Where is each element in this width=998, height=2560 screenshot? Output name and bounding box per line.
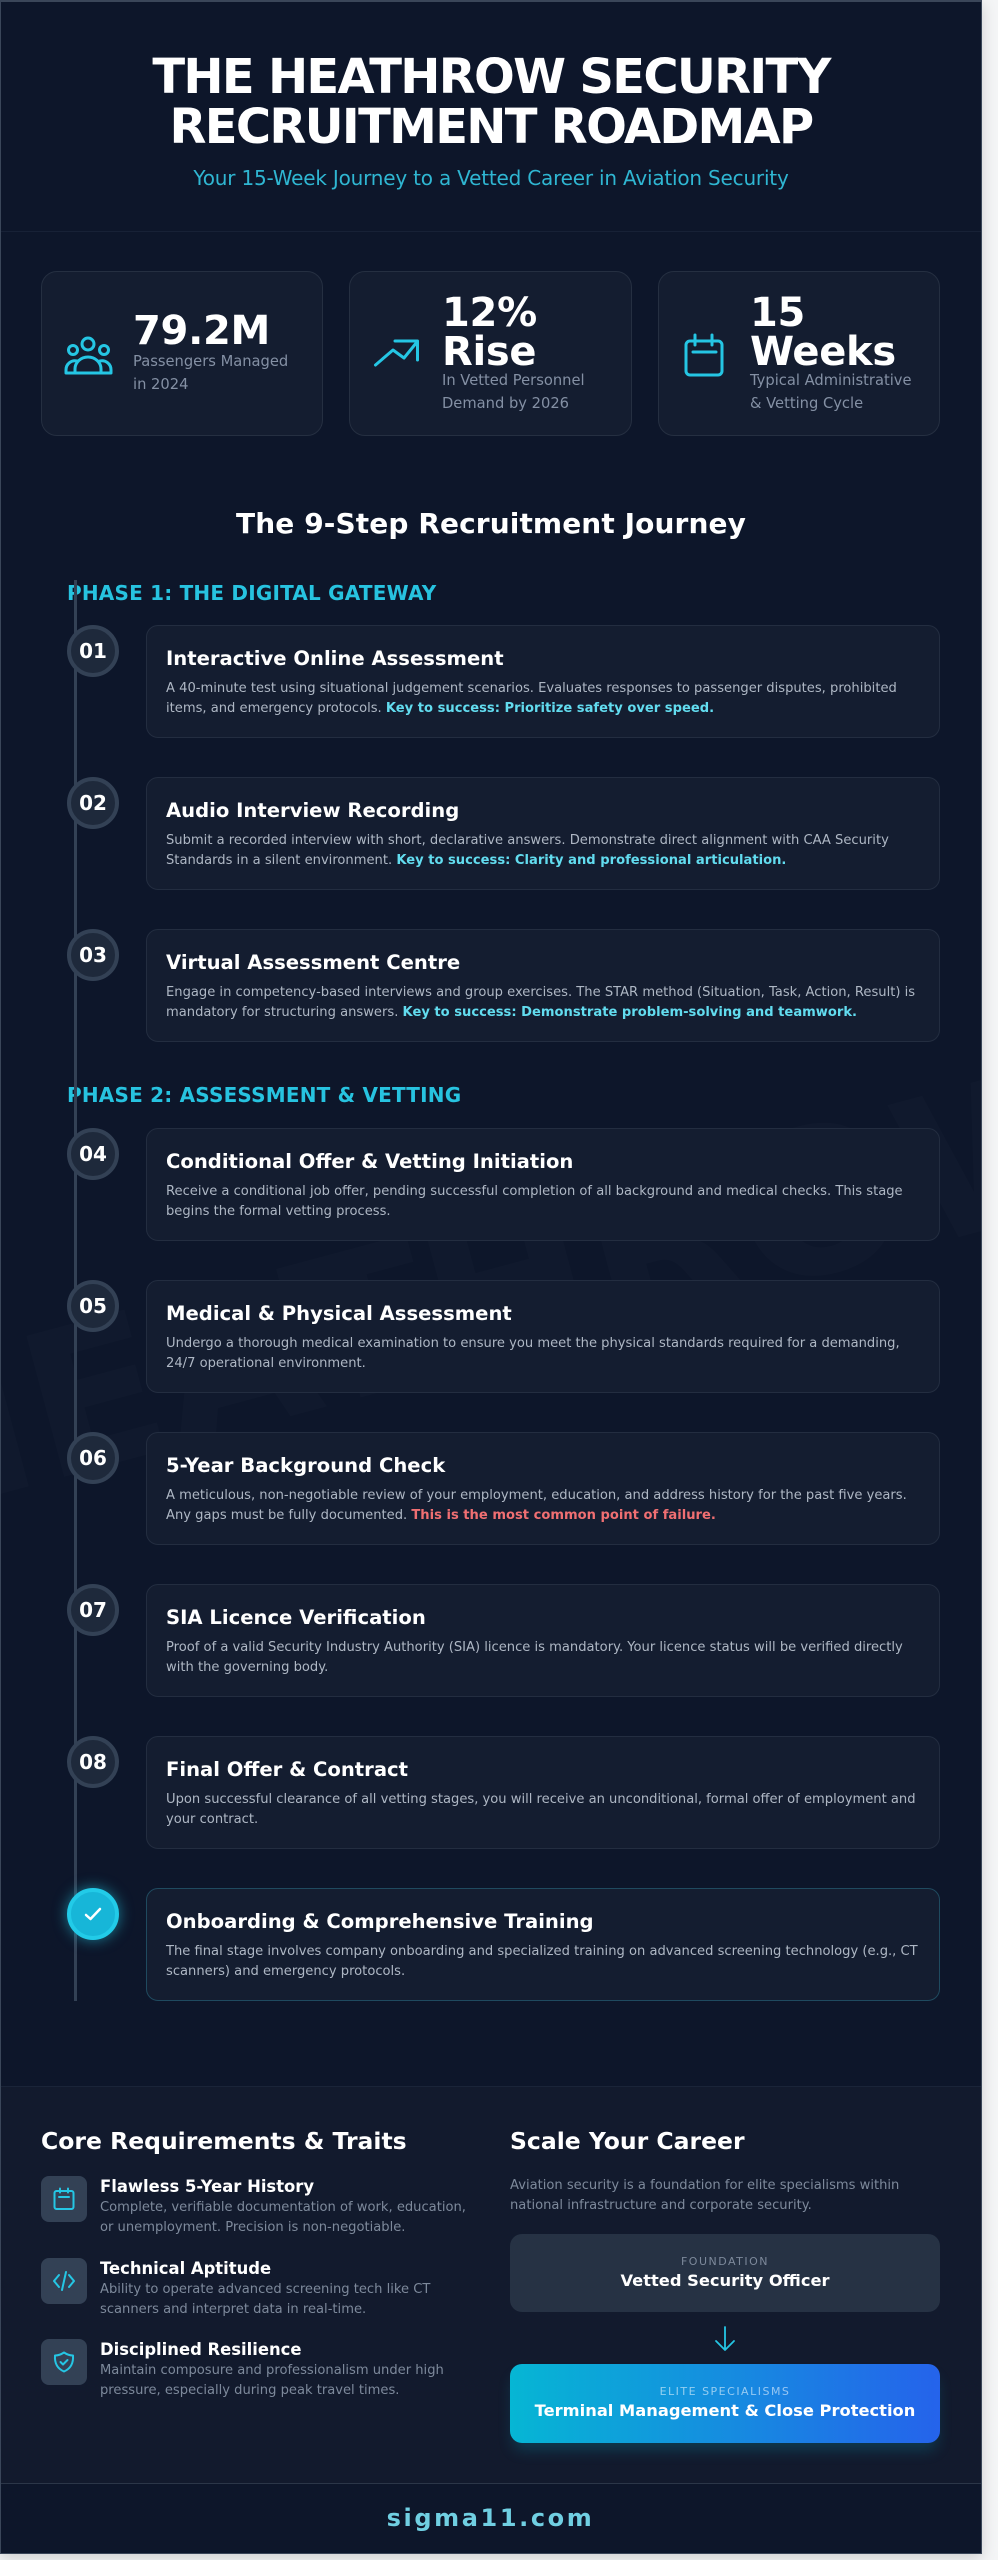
requirement text: Maintain composure and professionalism under high (100, 2363, 444, 2378)
elite box (510, 2364, 940, 2443)
step card (146, 777, 940, 890)
step title: 5-Year Background Check (166, 1454, 445, 1477)
step number (67, 625, 119, 677)
step description: mandatory for structuring answers. Key to success: Demonstrate problem-solving and teamwork. (166, 1005, 857, 1020)
timeline line (74, 580, 77, 2001)
step card (146, 1888, 940, 2001)
requirement title: Technical Aptitude (100, 2259, 271, 2278)
icon: users (64, 336, 112, 374)
step card (146, 929, 940, 1042)
step description: Standards in a silent environment. Key to success: Clarity and professional articulation. (166, 853, 786, 868)
step number: 06 (79, 1446, 107, 1470)
label: Passengers Managed (133, 353, 288, 370)
step description: A 40-minute test using situational judgement scenarios. Evaluates responses to passenger disputes, prohibited (166, 681, 897, 696)
requirement text: Complete, verifiable documentation of work, education, (100, 2200, 466, 2215)
phase 1 heading: PHASE 1: THE DIGITAL GATEWAY (67, 581, 436, 605)
step title: Medical & Physical Assessment (166, 1302, 512, 1325)
label: & Vetting Cycle (750, 395, 863, 412)
step card (146, 1736, 940, 1849)
step description: your contract. (166, 1812, 258, 1827)
foundation box (510, 2234, 940, 2312)
subtitle: Your 15-Week Journey to a Vetted Career in Aviation Security (193, 166, 789, 190)
step description: Submit a recorded interview with short, declarative answers. Demonstrate direct alignment with CAA Security (166, 833, 889, 848)
step title: SIA Licence Verification (166, 1606, 426, 1629)
requirement text (100, 2200, 466, 2235)
foundation role: Vetted Security Officer (620, 2271, 830, 2290)
career intro text: Aviation security is a foundation for elite specialisms within (510, 2178, 899, 2193)
career intro text: national infrastructure and corporate security. (510, 2198, 812, 2213)
step number (67, 777, 119, 829)
label (442, 372, 585, 412)
label (133, 353, 288, 393)
step 08 (67, 1736, 940, 1849)
footer: sigma11.com (387, 2504, 594, 2532)
step number (67, 1584, 119, 1636)
step description: Engage in competency-based interviews and group exercises. The STAR method (Situation, Task, Action, Result) is (166, 985, 915, 1000)
step 06 (67, 1432, 940, 1545)
step 07 (67, 1584, 940, 1697)
label: Demand by 2026 (442, 395, 569, 412)
icon: shield (41, 2339, 87, 2385)
step number: 03 (79, 943, 107, 967)
step number (67, 929, 119, 981)
step 01 (67, 625, 940, 738)
value: Weeks (750, 329, 896, 375)
step 09 (58, 1880, 940, 2001)
phase 2 heading: PHASE 2: ASSESSMENT & VETTING (67, 1083, 461, 1107)
step description: Any gaps must be fully documented. This is the most common point of failure. (166, 1508, 716, 1523)
step 02 (67, 777, 940, 890)
requirement text (100, 2363, 444, 2398)
step 04 (67, 1128, 940, 1241)
label (750, 372, 912, 412)
bottom section (1, 2086, 981, 2484)
stat card: weeks (658, 271, 940, 436)
value: 12% (442, 290, 537, 336)
step title: Interactive Online Assessment (166, 647, 504, 670)
step description: Proof of a valid Security Industry Authority (SIA) licence is mandatory. Your licence status will be verified directly (166, 1640, 903, 1655)
section heading: The 9-Step Recruitment Journey (236, 507, 746, 540)
step description: 24/7 operational environment. (166, 1356, 366, 1371)
heading: scale your career: Scale Your Career (510, 2127, 745, 2155)
step description: Receive a conditional job offer, pending successful completion of all background and medical checks. This stage (166, 1184, 903, 1199)
step number: 02 (79, 791, 107, 815)
requirement title: Disciplined Resilience (100, 2340, 301, 2359)
step title: Final Offer & Contract (166, 1758, 408, 1781)
career intro text (510, 2178, 899, 2213)
elite label: ELITE SPECIALISMS (660, 2385, 790, 2398)
step description (166, 833, 889, 868)
step number (67, 1736, 119, 1788)
step description (166, 1336, 900, 1371)
icon: code (41, 2258, 87, 2304)
step card (146, 625, 940, 738)
requirement: aptitude (41, 2258, 430, 2317)
step title: Conditional Offer & Vetting Initiation (166, 1150, 573, 1173)
step description: scanners) and emergency protocols. (166, 1964, 405, 1979)
step title: Virtual Assessment Centre (166, 951, 460, 974)
step number: 04 (79, 1142, 107, 1166)
foundation label: FOUNDATION (681, 2255, 769, 2268)
step 03 (67, 929, 940, 1042)
step title: Audio Interview Recording (166, 799, 459, 822)
step description (166, 1944, 918, 1979)
step description (166, 1792, 916, 1827)
value: 79.2M (133, 308, 270, 354)
step number: 01 (79, 639, 107, 663)
step description: A meticulous, non-negotiable review of your employment, education, and address history for the past five years. (166, 1488, 907, 1503)
step check marker (67, 1888, 119, 1940)
icon: check (84, 1908, 102, 1920)
title: THE HEATHROW SECURITY (152, 49, 830, 105)
icon: calendar (684, 334, 724, 376)
value: 15 (750, 290, 805, 336)
stat card: rise (349, 271, 632, 436)
step description (166, 985, 915, 1020)
step card (146, 1128, 940, 1241)
elite roles: Terminal Management & Close Protection (535, 2401, 915, 2420)
stat card: passengers (41, 271, 323, 436)
requirement title: Flawless 5-Year History (100, 2177, 314, 2196)
header (1, 2, 981, 232)
step number: 05 (79, 1294, 107, 1318)
icon: trending up (374, 340, 419, 367)
step description (166, 1640, 903, 1675)
requirement text: Ability to operate advanced screening tech like CT (100, 2282, 430, 2297)
title: RECRUITMENT ROADMAP (170, 98, 812, 154)
step description (166, 681, 897, 716)
requirement text: pressure, especially during peak travel times. (100, 2383, 399, 2398)
step title: Onboarding & Comprehensive Training (166, 1910, 594, 1933)
value: Rise (442, 329, 536, 375)
step description (166, 1488, 907, 1523)
arrow down (715, 2326, 735, 2351)
step card (146, 1280, 940, 1393)
step number (67, 1280, 119, 1332)
heading: core requirements: Core Requirements & Traits (41, 2127, 407, 2155)
step description: Undergo a thorough medical examination to ensure you meet the physical standards required for a demanding, (166, 1336, 900, 1351)
step description: begins the formal vetting process. (166, 1204, 391, 1219)
step description: The final stage involves company onboarding and specialized training on advanced screening technology (e.g., CT (166, 1944, 918, 1959)
step number (67, 1128, 119, 1180)
requirement: resilience (41, 2339, 444, 2398)
step number (67, 1432, 119, 1484)
requirement text: or unemployment. Precision is non-negotiable. (100, 2220, 405, 2235)
requirement text (100, 2282, 430, 2317)
step card (146, 1584, 940, 1697)
step description: Upon successful clearance of all vetting stages, you will receive an unconditional, formal offer of employment and (166, 1792, 916, 1807)
icon: calendar (41, 2176, 87, 2222)
step 05 (67, 1280, 940, 1393)
step number: 08 (79, 1750, 107, 1774)
step number: 07 (79, 1598, 107, 1622)
value (750, 290, 896, 375)
step description (166, 1184, 903, 1219)
label: Typical Administrative (750, 372, 912, 389)
label: in 2024 (133, 376, 188, 393)
label: In Vetted Personnel (442, 372, 585, 389)
title (152, 49, 832, 154)
requirement text: scanners and interpret data in real-time. (100, 2302, 366, 2317)
step description: items, and emergency protocols. Key to success: Prioritize safety over speed. (166, 701, 714, 716)
step description: with the governing body. (166, 1660, 328, 1675)
requirement: history (41, 2176, 466, 2235)
step card (146, 1432, 940, 1545)
value (442, 290, 537, 375)
